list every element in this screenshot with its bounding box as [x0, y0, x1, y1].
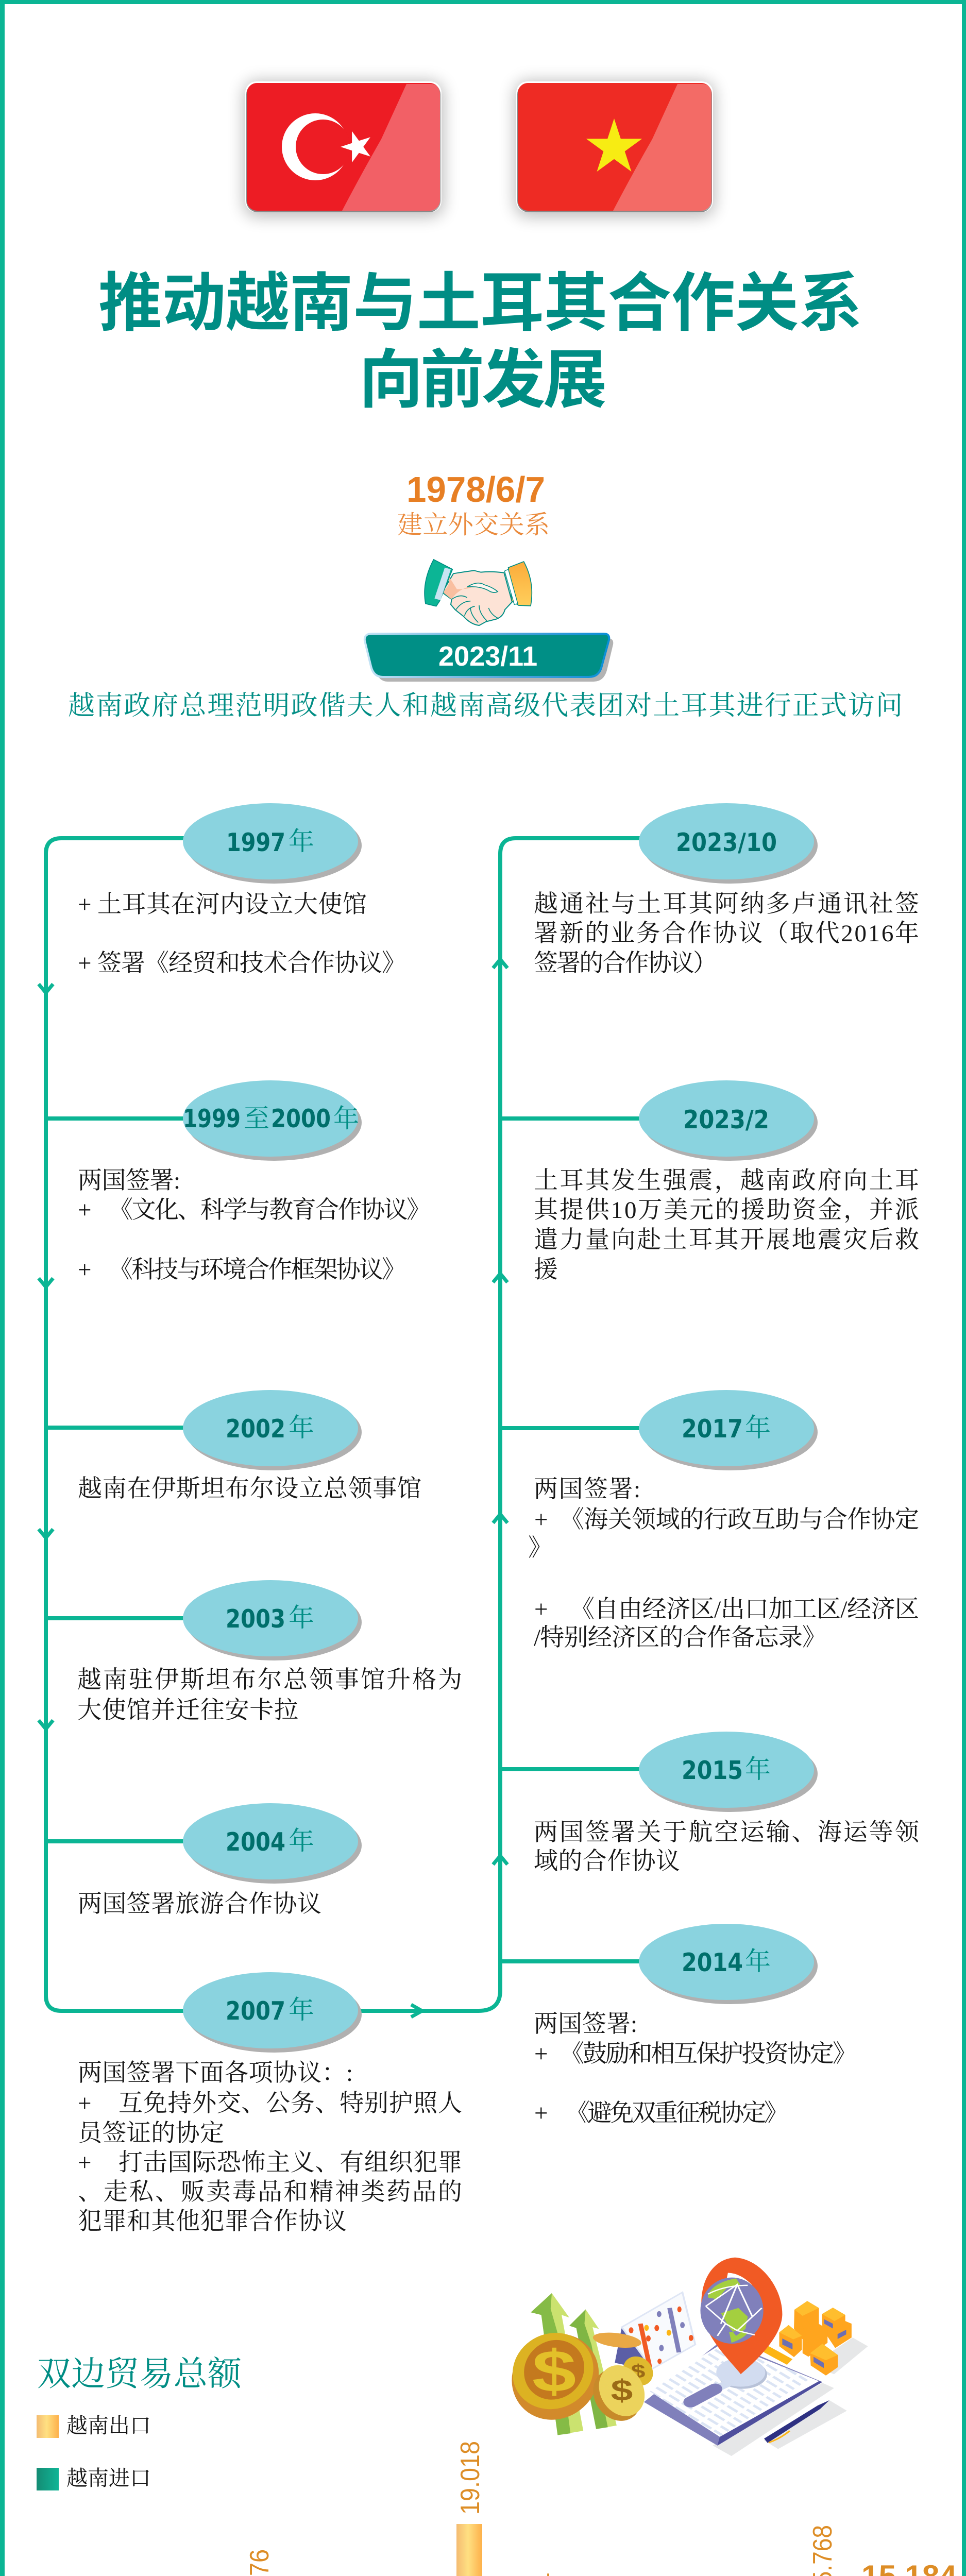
left column: 2004 — [78, 1803, 362, 1918]
right column: 2023/10: 2023/10 — [676, 828, 777, 857]
left column: 2002 — [78, 1390, 421, 1502]
left column: 1999-2000: + — [78, 1257, 92, 1283]
left column: 1999-2000: 两国签署: — [78, 1167, 180, 1194]
left column: 1999-2000: 2000 — [271, 1104, 331, 1133]
visit description: 越南政府总理范明政偕夫人和越南高级代表团对土耳其进行正式访问 — [68, 691, 903, 721]
left column: 2007: 、走私、贩卖毒品和精神类药品的 — [78, 2179, 462, 2206]
flag: Vietnam — [515, 81, 714, 216]
right column: 2014: 年 — [745, 1947, 771, 1976]
export values: 19.018 — [455, 2441, 485, 2515]
left column: 1997 — [78, 803, 406, 977]
left column: 1999-2000: 《科技与环境合作框架协议》 — [109, 1257, 406, 1283]
right column: 2017: /特别经济区的合作备忘录》 — [534, 1624, 826, 1651]
left column: 1999-2000: 至 — [244, 1104, 269, 1133]
right column: 2015: 年 — [745, 1755, 771, 1784]
date: diplomatic relations established: 1978/6/7 — [406, 469, 545, 510]
bar chart: exports and imports — [25, 2441, 945, 2576]
left column: 2004: 年 — [289, 1826, 314, 1855]
right column: 2015: 2015 — [682, 1756, 743, 1785]
right column: 2023/2: 2023/2 — [683, 1105, 769, 1134]
right column: 2023/10: 署新的业务合作协议（取代2016年 — [534, 920, 919, 947]
left column: 2003: 年 — [289, 1603, 314, 1632]
illustration: trade and finance: $ — [631, 2361, 645, 2382]
left column: 2003: 越南驻伊斯坦布尔总领事馆升格为 — [77, 1667, 462, 1693]
date: diplomatic relations established — [397, 469, 550, 539]
right column: 2017: + — [534, 1506, 548, 1533]
illustration: trade and finance — [504, 2258, 868, 2456]
right column: 2017: 两国签署: — [534, 1476, 640, 1503]
arrows: down — [39, 984, 53, 1729]
right column: 2014: 2014 — [682, 1948, 743, 1977]
right column: 2023/2: 土耳其发生强震，越南政府向土耳 — [534, 1167, 919, 1194]
left column: 2002: 越南在伊斯坦布尔设立总领事馆 — [78, 1476, 421, 1502]
right column: 2014: 《避免双重征税协定》 — [566, 2100, 788, 2127]
right column: 2023/2 — [534, 1080, 919, 1283]
title: 向前发展 — [359, 345, 607, 416]
left column: 1999-2000: + — [78, 1197, 92, 1224]
right column: 2014: 《鼓励和相互保护投资协定》 — [560, 2041, 857, 2067]
right column: 2023/10: 签署的合作协议） — [534, 950, 717, 977]
arrow: right — [411, 2005, 422, 2017]
left column: 1999-2000 — [78, 1080, 431, 1283]
left column: 2007: 犯罪和其他犯罪合作协议 — [78, 2208, 347, 2235]
left column: 2003: 2003 — [226, 1604, 285, 1634]
left column: 2003 — [77, 1580, 462, 1724]
icon: handshake — [425, 560, 532, 625]
illustration: trade and finance: $ — [611, 2374, 633, 2407]
title: 推动越南与土耳其合作关系 — [98, 268, 862, 339]
right column: 2015 — [534, 1732, 920, 1875]
right column: 2023/10 — [534, 803, 919, 977]
illustration: trade and finance: $ — [532, 2338, 576, 2404]
left column: 2007: 互免持外交、公务、特别护照人 — [118, 2090, 462, 2117]
left column: 1997: 签署《经贸和技术合作协议》 — [97, 950, 406, 977]
right column: 2014: 两国签署: — [534, 2011, 637, 2038]
left column: 2007 — [78, 1972, 462, 2235]
right column: 2023/2: 援 — [534, 1257, 558, 1283]
right column: 2014: + — [534, 2041, 548, 2067]
date pill: 2023/11: 2023/11 — [438, 641, 537, 672]
left column: 1997: + — [78, 891, 92, 918]
left column: 2004: 2004 — [226, 1827, 285, 1857]
left column: 2003: 大使馆并迁往安卡拉 — [77, 1697, 298, 1724]
left column: 2004: 两国签署旅游合作协议 — [78, 1891, 321, 1918]
right column: 2017: 》 — [528, 1535, 552, 1562]
export values — [30, 2441, 838, 2576]
legend: 越南出口 — [66, 2414, 151, 2437]
left column: 1999-2000: 1999 — [183, 1104, 241, 1133]
left column: 1997: 1997 — [226, 828, 285, 857]
left column: 2007: 打击国际恐怖主义、有组织犯罪 — [118, 2149, 462, 2176]
left column: 2007: 年 — [289, 1995, 314, 2024]
left column: 2002: 年 — [289, 1413, 314, 1442]
chart heading: 双边贸易总额 — [37, 2355, 242, 2393]
right column: 2017: 年 — [745, 1413, 771, 1442]
date: diplomatic relations established: 建立外交关系 — [397, 511, 550, 539]
right column: 2014 — [534, 1924, 857, 2127]
flag: Turkey — [244, 81, 443, 216]
left column: 1999-2000: 年 — [333, 1104, 359, 1133]
right column: 2015: 域的合作协议 — [534, 1848, 680, 1875]
legend — [37, 2414, 151, 2490]
left column: 2007: + — [78, 2149, 92, 2176]
right column: 2014: + — [534, 2100, 548, 2127]
right column: 2017: 2017 — [682, 1414, 743, 1444]
right column: 2023/2: 遣力量向赴土耳其开展地震灾后救 — [534, 1227, 919, 1253]
right column: 2017: 《海关领域的行政互助与合作协定 — [560, 1506, 919, 1533]
left column: 2007: 2007 — [226, 1996, 285, 2026]
export bars — [33, 2524, 906, 2576]
arrows: up — [493, 959, 507, 1865]
left column: 2007: 两国签署下面各项协议：: — [78, 2060, 353, 2087]
right column: 2023/10: 越通社与土耳其阿纳多卢通讯社签 — [534, 891, 919, 918]
left column: 2007: 员签证的协定 — [78, 2120, 224, 2147]
left column: 2007: + — [78, 2090, 92, 2117]
right column: 2023/2: 其提供10万美元的援助资金，并派 — [534, 1197, 919, 1224]
date pill: 2023/11 — [365, 634, 613, 682]
title — [98, 268, 862, 416]
legend: 越南进口 — [66, 2466, 151, 2490]
right column: 2015: 两国签署关于航空运输、海运等领 — [534, 1819, 920, 1846]
right column: 2017: + — [534, 1596, 548, 1623]
left column: 1997: + — [78, 950, 92, 977]
right column: 2017 — [528, 1390, 919, 1651]
timeline connectors — [39, 838, 641, 2017]
left column: 2002: 2002 — [226, 1414, 285, 1444]
left column: 1997: 年 — [289, 827, 314, 856]
left column: 1997: 土耳其在河内设立大使馆 — [97, 891, 367, 918]
right column: 2017: 《自由经济区/出口加工区/经济区 — [570, 1596, 919, 1623]
left column: 1999-2000: 《文化、科学与教育合作协议》 — [109, 1197, 431, 1224]
